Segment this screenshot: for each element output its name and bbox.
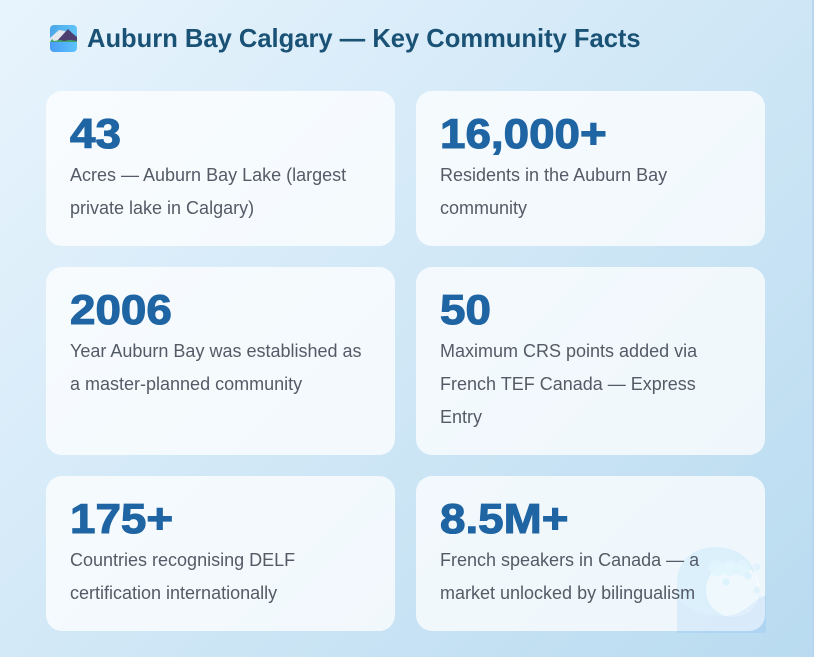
panel: lake acres xyxy=(46,91,395,246)
stat: 43: 43 xyxy=(70,110,121,157)
description: French speakers xyxy=(440,550,700,603)
panel: DELF countries xyxy=(46,476,395,631)
stat: 175+: 175+ xyxy=(70,495,173,542)
description: DELF countries: certification internationally xyxy=(70,583,277,603)
description: year established: Year Auburn Bay was established as xyxy=(70,341,362,361)
stat: 16,000+: 16,000+ xyxy=(440,110,607,157)
description: French speakers: French speakers in Canada — a xyxy=(440,550,699,570)
description: CRS points xyxy=(440,341,698,427)
description: DELF countries xyxy=(70,550,295,603)
description: DELF countries: Countries recognising DELF xyxy=(70,550,295,570)
panel: CRS points xyxy=(416,267,765,455)
stat: 2006: 2006 xyxy=(70,286,172,333)
panel: French speakers xyxy=(416,476,765,631)
panel: residents xyxy=(416,91,765,246)
description: lake acres: Acres — Auburn Bay Lake (largest xyxy=(70,165,346,185)
description: CRS points: Maximum CRS points added via xyxy=(440,341,697,361)
stat: 50: 50 xyxy=(440,286,491,333)
description: CRS points: Entry xyxy=(440,407,482,427)
description: French speakers: market unlocked by bilingualism xyxy=(440,583,695,603)
description: lake acres xyxy=(70,165,346,218)
icon: lake and mountains xyxy=(50,25,77,52)
stat: 8.5M+: 8.5M+ xyxy=(440,495,569,542)
panel: year established xyxy=(46,267,395,455)
description: residents xyxy=(440,165,668,218)
description: lake acres: private lake in Calgary) xyxy=(70,198,254,218)
title: Auburn Bay Calgary — Key Community Facts xyxy=(87,25,641,53)
description: year established xyxy=(70,341,362,394)
description: residents: community xyxy=(440,198,527,218)
icon: faded wave watermark xyxy=(677,547,766,633)
description: year established: a master-planned community xyxy=(70,374,302,394)
description: residents: Residents in the Auburn Bay xyxy=(440,165,667,185)
description: CRS points: French TEF Canada — Express xyxy=(440,374,696,394)
